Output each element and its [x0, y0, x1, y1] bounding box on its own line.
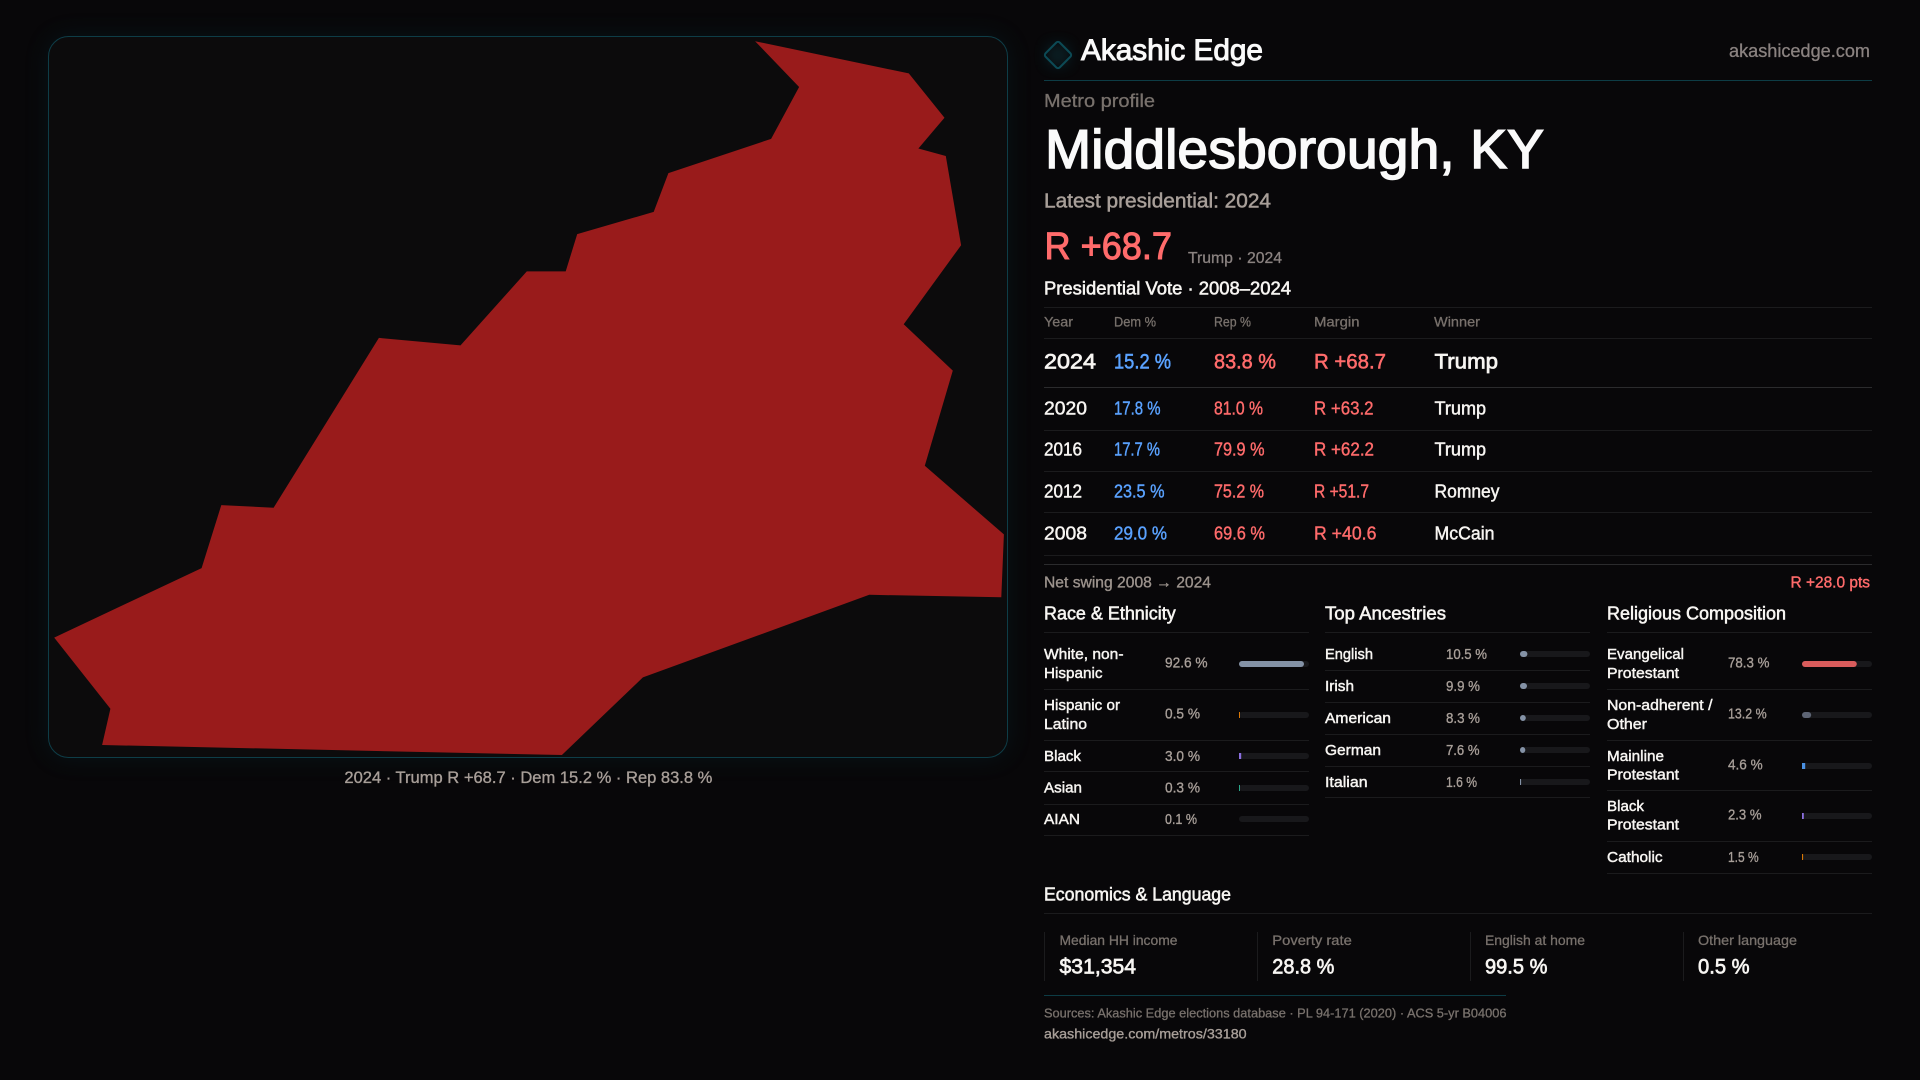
table heading: Presidential Vote · 2008–2024	[1044, 279, 1291, 299]
row: german	[1325, 742, 1590, 759]
row: hispanic	[1044, 697, 1309, 733]
header: brand	[1044, 34, 1872, 80]
row: catholic: 1.5 %	[1728, 849, 1759, 866]
table: presidential vote	[1044, 279, 1872, 591]
row 2008: 29.0 %	[1114, 523, 1167, 543]
row: italian: 1.6 %	[1446, 774, 1477, 791]
heading: Top Ancestries	[1325, 603, 1446, 623]
row 2012: R +51.7	[1314, 481, 1369, 501]
panel: race and ethnicity	[1044, 603, 1309, 836]
heading: Religious Composition	[1607, 603, 1786, 623]
row: irish	[1325, 678, 1590, 695]
row: hispanic: Latino	[1044, 716, 1087, 733]
row: black protestant: Black	[1607, 798, 1644, 815]
row 2020: 17.8 %	[1114, 398, 1160, 418]
stat: median income: Median HH income	[1060, 932, 1178, 948]
footer: sources	[1044, 996, 1506, 1041]
row: non-adherent: Other	[1607, 716, 1647, 733]
table header row: Margin	[1314, 314, 1360, 330]
row: english: English	[1325, 646, 1373, 663]
row: asian: Asian	[1044, 780, 1082, 797]
row: white	[1044, 646, 1309, 682]
row: black protestant: Protestant	[1607, 817, 1680, 834]
row: mainline: 4.6 %	[1728, 756, 1763, 774]
row 2016: 2016	[1044, 440, 1082, 460]
row 2012	[1044, 481, 1500, 501]
stat: other language: 0.5 %	[1698, 955, 1750, 978]
row: german: German	[1325, 742, 1381, 759]
table header row	[1044, 314, 1480, 330]
stat: english at home: English at home	[1485, 932, 1585, 948]
row: evangelical	[1607, 646, 1872, 682]
row: black protestant	[1607, 798, 1872, 834]
table header row: Rep %	[1214, 314, 1251, 330]
row: black: Black	[1044, 748, 1081, 765]
map caption: 2024 · Trump R +68.7 · Dem 15.2 % · Rep 83.8 %	[344, 768, 712, 787]
stat: poverty: 28.8 %	[1272, 955, 1334, 978]
panel: economics and language	[1044, 885, 1872, 981]
eyebrow: Metro profile	[1044, 91, 1155, 111]
row 2016: 79.9 %	[1214, 440, 1264, 460]
row 2012: 75.2 %	[1214, 481, 1264, 501]
row 2024: Trump	[1434, 350, 1498, 373]
stat: english at home: 99.5 %	[1485, 955, 1547, 978]
row: black: 3.0 %	[1165, 748, 1200, 765]
row: american	[1325, 710, 1590, 727]
net swing	[1044, 574, 1870, 591]
row: mainline	[1607, 748, 1872, 784]
row 2012: 23.5 %	[1114, 481, 1164, 501]
row: asian: 0.3 %	[1165, 780, 1200, 797]
heading: Economics & Language	[1044, 885, 1231, 905]
stat: other language: Other language	[1698, 932, 1797, 948]
row: evangelical: Protestant	[1607, 665, 1680, 682]
stat: median income	[1044, 932, 1178, 981]
row 2024	[1044, 350, 1498, 373]
row 2016: Trump	[1434, 440, 1486, 460]
net swing: R +28.0 pts	[1790, 574, 1870, 591]
row 2016: 17.7 %	[1114, 440, 1160, 460]
row 2024: R +68.7	[1314, 350, 1386, 373]
row 2012: 2012	[1044, 481, 1082, 501]
headline winner: Trump · 2024	[1188, 250, 1282, 267]
stat: poverty: Poverty rate	[1272, 932, 1352, 948]
row: aian: 0.1 %	[1165, 811, 1197, 828]
row 2008: 2008	[1044, 523, 1087, 543]
headline margin: R +68.7	[1044, 226, 1172, 268]
source note: Sources: Akashic Edge elections database · PL 94-171 (2020) · ACS 5-yr B04006	[1044, 1006, 1506, 1021]
row: black	[1044, 748, 1309, 765]
row: german: 7.6 %	[1446, 742, 1480, 759]
source url: akashicedge.com/metros/33180	[1044, 1025, 1247, 1041]
net swing: Net swing 2008 → 2024	[1044, 574, 1211, 591]
row: asian	[1044, 780, 1309, 797]
row: evangelical: Evangelical	[1607, 646, 1684, 663]
row: catholic	[1607, 849, 1872, 866]
stat: median income: $31,354	[1060, 955, 1136, 978]
table header row: Year	[1044, 314, 1073, 330]
row: hispanic: Hispanic or	[1044, 697, 1120, 714]
brand name: Akashic Edge	[1081, 34, 1263, 67]
row: white: Hispanic	[1044, 665, 1103, 682]
row 2024: 83.8 %	[1214, 350, 1276, 373]
row: italian	[1325, 774, 1590, 791]
row 2008: 69.6 %	[1214, 523, 1265, 543]
row 2012: Romney	[1434, 481, 1500, 501]
row: english	[1325, 646, 1590, 663]
row: catholic: Catholic	[1607, 849, 1663, 866]
row: white: 92.6 %	[1165, 654, 1208, 672]
map shape: Middlesborough metro	[54, 41, 1004, 755]
row: italian: Italian	[1325, 774, 1368, 791]
row: black protestant: 2.3 %	[1728, 806, 1762, 824]
row: white: White, non-	[1044, 646, 1124, 663]
row 2008: McCain	[1434, 523, 1494, 543]
row 2020: 2020	[1044, 398, 1087, 418]
heading: Race & Ethnicity	[1044, 603, 1176, 623]
row: non-adherent: 13.2 %	[1728, 706, 1767, 722]
row 2020: Trump	[1434, 398, 1486, 418]
row: irish: Irish	[1325, 678, 1354, 695]
row: aian: AIAN	[1044, 811, 1080, 828]
panel: top ancestries	[1325, 603, 1590, 798]
table header row: Dem %	[1114, 314, 1156, 330]
panel: religious composition	[1607, 603, 1872, 874]
icon: diamond logo	[1044, 41, 1072, 69]
panel: metro map	[48, 36, 1008, 758]
row 2020: 81.0 %	[1214, 398, 1263, 418]
row 2016	[1044, 440, 1486, 460]
stat: english at home	[1470, 932, 1585, 981]
table header row: Winner	[1434, 314, 1480, 330]
row: aian	[1044, 811, 1309, 828]
row 2020: R +63.2	[1314, 398, 1374, 418]
row 2024: 2024	[1044, 350, 1096, 373]
row 2016: R +62.2	[1314, 440, 1374, 460]
row: hispanic: 0.5 %	[1165, 706, 1200, 722]
row: irish: 9.9 %	[1446, 678, 1480, 695]
heading block	[1044, 91, 1544, 268]
row: evangelical: 78.3 %	[1728, 654, 1769, 672]
stat: other language	[1684, 932, 1797, 981]
stat: poverty	[1258, 932, 1352, 981]
row: non-adherent	[1607, 697, 1872, 733]
row 2008: R +40.6	[1314, 523, 1376, 543]
row: mainline: Protestant	[1607, 767, 1680, 784]
row: non-adherent: Non-adherent /	[1607, 697, 1713, 714]
subtitle: Latest presidential: 2024	[1044, 190, 1271, 212]
row: american: 8.3 %	[1446, 710, 1480, 727]
title: Middlesborough, KY	[1045, 118, 1544, 180]
row: mainline: Mainline	[1607, 748, 1664, 765]
row: american: American	[1325, 710, 1391, 727]
row: english: 10.5 %	[1446, 646, 1487, 663]
row 2008	[1044, 523, 1494, 543]
row 2024: 15.2 %	[1114, 350, 1171, 373]
row 2020	[1044, 398, 1486, 418]
site link: akashicedge.com	[1729, 41, 1870, 61]
